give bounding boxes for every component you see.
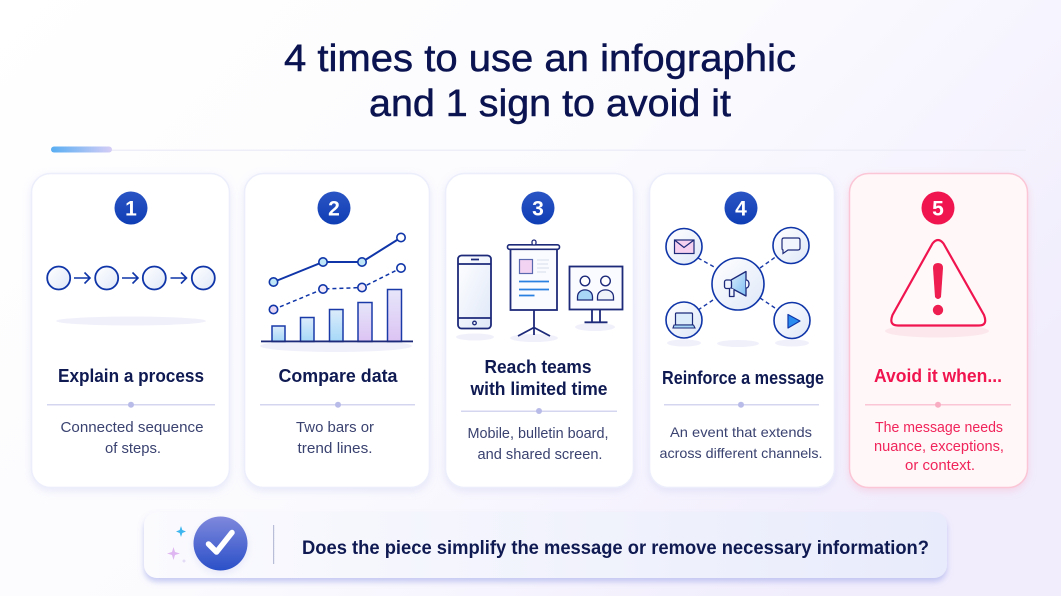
callout: key question <box>144 512 947 578</box>
number badge 1 <box>114 192 148 224</box>
title <box>284 38 796 125</box>
description: The message needs <box>875 420 1003 436</box>
icon: check badge <box>194 516 248 570</box>
panel: reinforce a message <box>650 174 834 488</box>
icon: play <box>788 314 800 328</box>
icon: chat bubble <box>782 238 800 254</box>
panel: reach teams <box>446 174 634 488</box>
number badge 1: 1 <box>125 198 137 220</box>
progress rule <box>51 146 1026 152</box>
heading: Reinforce a message <box>662 368 824 388</box>
panel: explain a process <box>32 174 230 488</box>
title: 4 times to use an infographic <box>284 38 796 80</box>
icon: channels network <box>666 228 810 347</box>
description <box>660 424 822 461</box>
description: nuance, exceptions, <box>874 439 1004 455</box>
icon: laptop <box>673 313 695 328</box>
description <box>60 419 204 457</box>
number badge 5 <box>922 192 954 224</box>
icon: megaphone <box>724 272 749 296</box>
panel: compare data <box>244 174 430 488</box>
question text: Does the piece simplify the message or remove necessary information? <box>302 537 929 559</box>
heading: Reach teams <box>484 357 592 377</box>
number badge 5: 5 <box>932 198 944 220</box>
number badge 3: 3 <box>532 198 544 220</box>
heading: Explain a process <box>58 366 204 386</box>
divider <box>865 402 1011 408</box>
description <box>874 420 1004 474</box>
description: of steps. <box>105 440 161 457</box>
chart: bars and trend lines <box>260 233 413 352</box>
icon: shared screen <box>570 266 622 331</box>
description: across different channels. <box>660 445 822 461</box>
title: and 1 sign to avoid it <box>369 83 731 125</box>
description <box>296 419 374 457</box>
icon: warning triangle <box>885 240 989 338</box>
description: Connected sequence <box>60 419 204 436</box>
description: An event that extends <box>670 424 812 440</box>
number badge 4: 4 <box>735 198 747 220</box>
divider <box>260 402 415 408</box>
description: Mobile, bulletin board, <box>468 425 608 442</box>
heading: with limited time <box>470 379 608 399</box>
description: and shared screen. <box>478 446 602 463</box>
description: Two bars or <box>296 419 374 436</box>
description: trend lines. <box>298 440 372 457</box>
icon: process sequence <box>47 266 215 326</box>
number badge 3 <box>522 192 554 224</box>
divider <box>461 408 617 414</box>
heading <box>470 357 608 399</box>
panel: avoid it when <box>850 174 1028 488</box>
number badge 2: 2 <box>328 198 340 220</box>
description: or context. <box>905 458 975 474</box>
divider <box>47 402 215 408</box>
heading: Compare data <box>278 366 398 386</box>
icon: bulletin board <box>508 240 560 342</box>
heading: Avoid it when... <box>874 366 1002 386</box>
number badge 4 <box>724 192 758 224</box>
number badge 2 <box>318 192 350 224</box>
icon: envelope <box>674 240 694 254</box>
divider <box>664 402 819 408</box>
icon: phone <box>456 256 494 340</box>
icon: sparkles <box>167 526 186 562</box>
description <box>468 425 608 463</box>
